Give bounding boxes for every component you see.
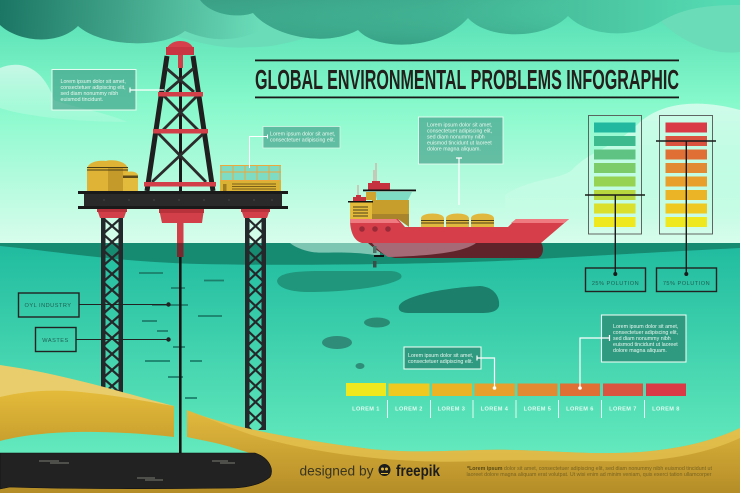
sand left xyxy=(0,365,174,441)
footer: designed by freepik: freepik xyxy=(396,463,440,480)
label: wastes: WASTES xyxy=(42,338,69,344)
callout: lorem 4 note: Lorem ipsum dolor sit amet, xyxy=(408,353,473,359)
sea xyxy=(0,243,740,493)
oil spills on sea xyxy=(277,271,499,369)
scale labels: LOREM 8 xyxy=(652,406,680,412)
label: 75% polution xyxy=(656,141,716,292)
callout: ship note: sed diam nonummy nibh xyxy=(427,134,485,140)
callout: ship note: euismod tincidunt ut laoreet xyxy=(427,140,492,146)
callout: lorem 6 note: sed diam nonummy nibh xyxy=(613,336,671,342)
footnote: laoreet dolore magna aliquam erat volutpat. Ut wisi enim ad minim veniam, quis exerci tation ullamcorper xyxy=(466,472,712,478)
callout: ship note: consectetuer adipiscing elit, xyxy=(427,128,492,134)
callout: lorem 6 note: euismod tincidunt ut laoreet xyxy=(613,342,678,348)
label: wastes xyxy=(36,328,171,352)
sky background xyxy=(0,0,740,244)
callout: lorem 6 note: Lorem ipsum dolor sit amet, xyxy=(613,324,678,330)
footnote xyxy=(466,466,713,478)
red leg mounts xyxy=(97,209,270,223)
right rig leg xyxy=(245,218,266,430)
footer: designed by freepik: designed by xyxy=(300,462,374,478)
central red riser and drill pipe xyxy=(177,223,184,455)
sand right and seabed xyxy=(0,410,740,493)
label: 25% polution: 25% POLUTION xyxy=(592,281,639,287)
ship xyxy=(348,163,569,268)
callout: lorem 4 note: consectetuer adipiscing elit. xyxy=(408,359,473,365)
callout: ship note xyxy=(418,117,503,205)
callout: derrick note: consectetuer adipiscing elit, xyxy=(60,85,126,91)
clouds xyxy=(0,0,740,53)
scale bar xyxy=(346,383,686,396)
oil reservoir xyxy=(0,453,271,489)
left rig leg xyxy=(101,218,123,394)
scale labels xyxy=(352,400,680,418)
chart: 75% pollution stack xyxy=(660,116,712,234)
callout: deck building note xyxy=(250,126,340,168)
scale labels: LOREM 6 xyxy=(566,406,594,412)
label: 25% polution xyxy=(585,195,646,292)
label: oyl industry xyxy=(18,293,171,317)
deck building with railings xyxy=(220,165,281,191)
scale labels: LOREM 4 xyxy=(481,406,509,412)
callout: deck building note: consectetuer adipiscing elit. xyxy=(270,138,335,144)
callout: derrick note: euismod tincidunt. xyxy=(60,97,103,103)
callout: derrick note: Lorem ipsum dolor sit amet, xyxy=(60,79,126,85)
connector: lorem 6 xyxy=(578,335,610,390)
callout: ship note: Lorem ipsum dolor sit amet, xyxy=(427,122,492,128)
dark sea horizon band xyxy=(0,243,740,265)
callout: ship note: dolore magna aliquam. xyxy=(427,146,481,152)
storage tanks xyxy=(87,160,138,191)
label: oyl industry: OYL INDUSTRY xyxy=(24,303,72,309)
label: 75% polution: 75% POLUTION xyxy=(663,281,710,287)
scale labels: LOREM 1 xyxy=(352,406,380,412)
callout: lorem 6 note xyxy=(602,315,686,362)
chart: 25% pollution stack xyxy=(588,116,642,234)
footer: designed by freepik xyxy=(300,462,440,480)
callout: deck building note: Lorem ipsum dolor sit amet, xyxy=(270,132,335,138)
callout: lorem 6 note: consectetuer adipiscing elit, xyxy=(613,330,678,336)
scale labels: LOREM 5 xyxy=(524,406,551,412)
callout: derrick note: sed diam nonummy nibh xyxy=(60,91,118,97)
oil dash marks xyxy=(139,273,224,398)
scale labels: LOREM 7 xyxy=(609,406,637,412)
callout: lorem 4 note xyxy=(404,347,481,369)
derrick tower xyxy=(144,41,216,191)
oil rig platform deck xyxy=(78,191,288,209)
connector: lorem 4 xyxy=(477,356,496,390)
footnote: *Lorem ipsum dolor sit amet, consectetuer adipiscing elit, sed diam nonummy nibh euismod tincidunt ut xyxy=(467,466,713,472)
callout: derrick note xyxy=(52,70,164,110)
pale slick beside ship xyxy=(290,243,380,256)
scale labels: LOREM 2 xyxy=(395,406,423,412)
scale labels: LOREM 3 xyxy=(438,406,465,412)
pale background clouds xyxy=(0,65,740,215)
callout: lorem 6 note: dolore magna aliquam. xyxy=(613,348,667,354)
